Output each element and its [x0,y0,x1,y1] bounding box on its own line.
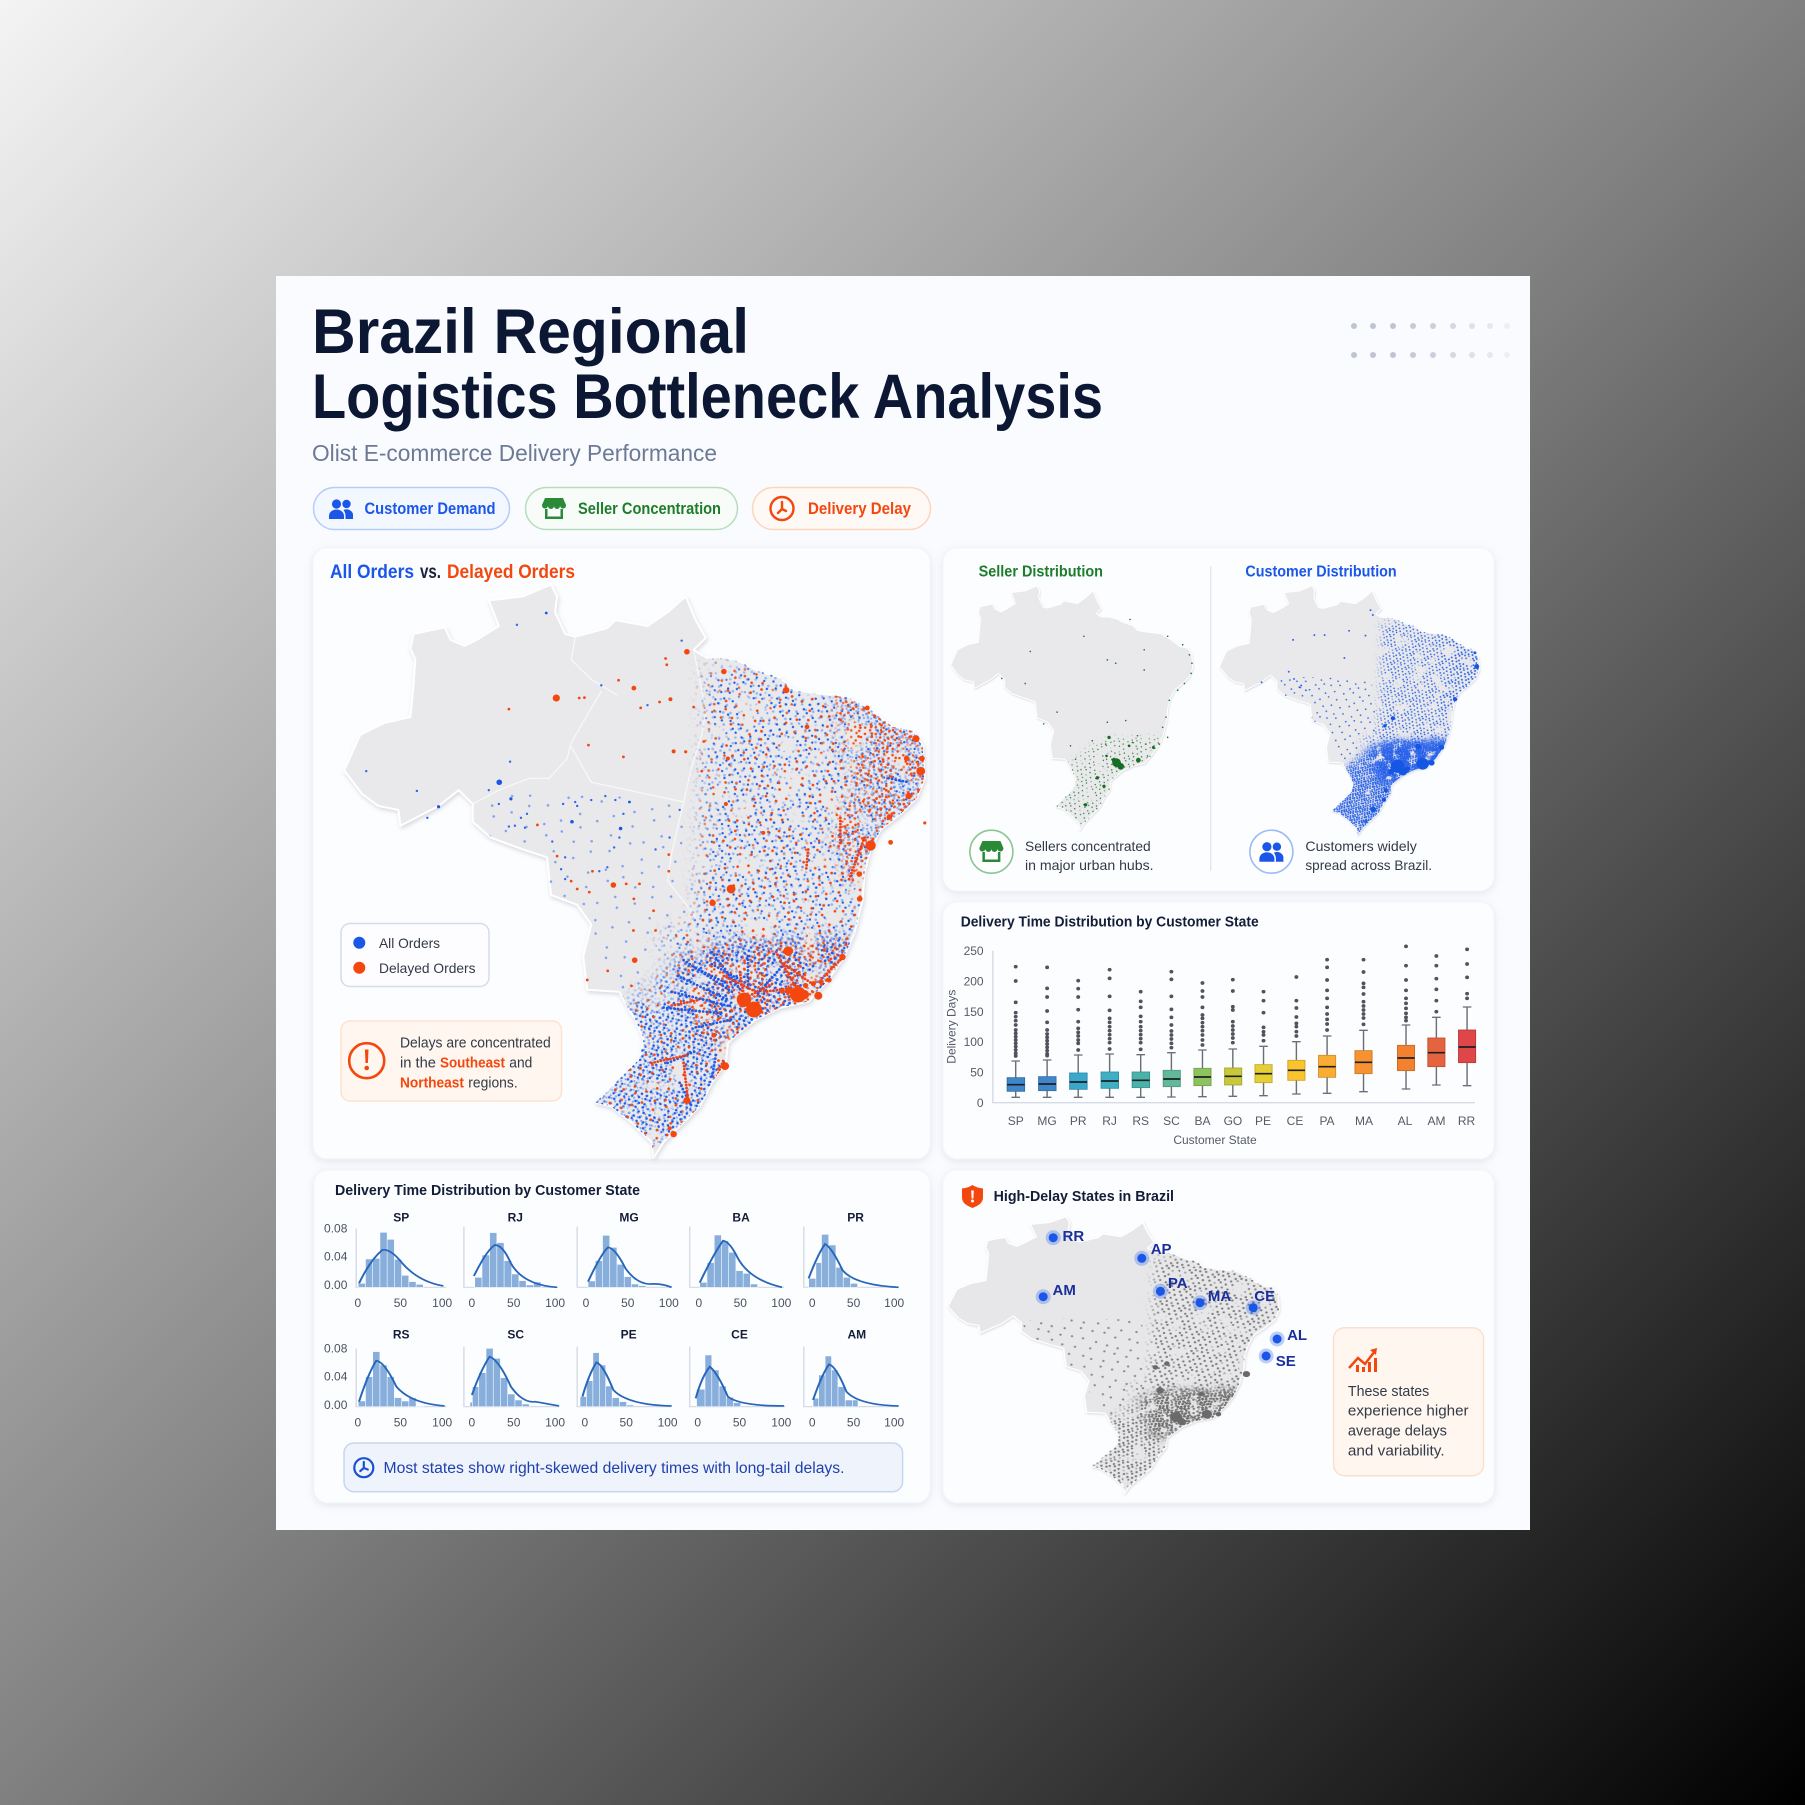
histogram: PR: 50 [847,1296,861,1310]
heading: all orders vs delayed: Delayed Orders [447,562,575,583]
histogram: SP [324,1211,453,1310]
y axis labels: 50 [970,1066,984,1080]
histogram: RJ [464,1211,565,1310]
title: Logistics Bottleneck Analysis [312,362,1103,432]
x axis labels: CE [1287,1114,1303,1128]
histogram: BA: 50 [734,1296,747,1310]
histogram: BA: 0 [696,1296,703,1310]
callout text: regions. [468,1075,518,1091]
heading: seller distribution: Seller Distribution [979,564,1103,581]
histogram: BA: BA [732,1211,750,1225]
pill: delivery delay [752,488,930,530]
histogram: SP: 50 [394,1296,407,1310]
x axis labels: SC [1163,1114,1180,1128]
infographic card [276,276,1530,1530]
title: Brazil Regional [312,297,749,367]
histogram: MG: MG [619,1211,639,1225]
histogram: PR: 0 [809,1296,816,1310]
decorative dot grid [1351,323,1510,358]
histogram: SP: 0.04 [324,1250,348,1264]
histogram: PE: PE [621,1327,637,1341]
state markers [1036,1228,1307,1370]
histogram: SP: 0 [354,1296,361,1310]
x axis labels: BA [1194,1114,1211,1128]
state markers: CE [1254,1288,1275,1305]
histogram: AM: AM [847,1327,866,1341]
callout text: experience higher [1348,1403,1469,1420]
x axis labels: RJ [1102,1114,1117,1128]
histogram: SC [464,1327,565,1430]
state markers: PA [1168,1275,1188,1292]
y axis labels: 100 [964,1035,984,1049]
heading: all orders vs delayed: vs. [420,562,441,583]
panel: all orders vs delayed orders [313,548,930,1159]
histogram: MG: 100 [659,1296,679,1310]
map: high-delay states [948,1217,1279,1493]
histogram: SP: SP [393,1211,409,1225]
histogram: AM: 100 [884,1416,905,1430]
x axis labels: MG [1037,1114,1057,1128]
x axis labels: AM [1428,1114,1446,1128]
x axis labels: PA [1319,1114,1335,1128]
callout text: These states [1348,1383,1429,1400]
customer note: spread across Brazil. [1305,857,1432,873]
histogram: RS: 100 [432,1416,453,1430]
histogram: RS: 0.04 [324,1370,348,1384]
callout text: and [509,1056,532,1072]
histogram: RJ: RJ [508,1211,523,1225]
histogram: PR: 100 [884,1296,905,1310]
state markers: MA [1208,1288,1231,1305]
histogram: BA [690,1211,792,1310]
callout: delay regions [341,1021,562,1101]
legend [341,924,489,986]
state markers: AM [1052,1282,1076,1299]
histogram: SP: 0.00 [324,1278,348,1292]
subtitle: Olist E-commerce Delivery Performance [312,440,717,466]
pill: seller concentration [526,488,738,530]
note: right-skewed delivery times [344,1443,903,1492]
histogram: SC: 0 [469,1416,476,1430]
histogram: PE: 0 [581,1416,588,1430]
icon: clock [770,497,794,520]
heading: high-delay states: High-Delay States in Brazil [994,1188,1174,1205]
panel: histograms [314,1170,930,1503]
histogram: RS: 50 [394,1416,407,1430]
pill: seller concentration: Seller Concentration [578,500,721,518]
map: customer distribution [1219,586,1479,835]
icon: trend chart [1349,1348,1377,1372]
state markers: AL [1287,1327,1307,1344]
icon: clock [354,1458,373,1477]
icon: warning shield [962,1185,983,1208]
histogram: CE: 0 [694,1416,701,1430]
seller note [970,830,1154,873]
histogram: PR [804,1211,905,1310]
y axis labels: 250 [964,944,984,958]
x axis labels: MA [1355,1114,1373,1128]
histogram: RJ: 100 [545,1296,565,1310]
x axis labels: GO [1224,1114,1242,1128]
histogram: SC: 50 [507,1416,521,1430]
histogram: RS: RS [393,1327,410,1341]
heading: all orders vs delayed [330,562,575,583]
histogram: PE [577,1327,678,1430]
callout text: in the [400,1056,436,1072]
heading: histogram small multiples: Delivery Time Distribution by Customer State [335,1183,640,1199]
callout text: Delays are concentrated [400,1036,551,1052]
histogram: CE [690,1327,792,1430]
panel: seller and customer distribution [943,548,1494,891]
x axis labels: PE [1255,1114,1271,1128]
histogram: SP: 100 [432,1296,453,1310]
histogram: RJ: 50 [507,1296,521,1310]
note: right-skewed delivery times: Most states show right-skewed delivery times with long-tail delays. [384,1460,844,1477]
x axis labels: RR [1458,1114,1475,1128]
histogram: RS: 0.08 [324,1341,348,1355]
state markers: SE [1276,1353,1296,1370]
icon: people [329,499,353,519]
map: orders across Brazil [344,585,926,1158]
state markers: AP [1151,1241,1172,1258]
pill: delivery delay: Delivery Delay [808,500,912,518]
title [312,297,1103,432]
histogram: MG: 0 [583,1296,590,1310]
heading: customer distribution: Customer Distribution [1245,564,1397,581]
callout text: average delays [1348,1423,1447,1440]
icon: shop badge [970,830,1013,873]
histogram: SC: SC [507,1327,524,1341]
histogram: CE: 50 [733,1416,746,1430]
legend: Delayed Orders [379,960,476,976]
chart: box plot by state [944,944,1476,1147]
histogram: BA: 100 [771,1296,792,1310]
callout text: and variability. [1348,1443,1445,1460]
y axis labels [964,944,984,1110]
histogram: CE: 100 [771,1416,792,1430]
seller note: in major urban hubs. [1025,857,1154,873]
icon: shop [542,498,566,519]
histogram: CE: CE [731,1327,748,1341]
histogram: MG: 50 [621,1296,635,1310]
x axis title: Customer State [1173,1133,1257,1147]
panel: high-delay states [943,1170,1494,1503]
pill: customer demand [314,488,510,530]
histogram: PR: PR [847,1211,864,1225]
histogram: AM: 50 [847,1416,861,1430]
legend: All Orders [379,935,440,951]
histogram: PE: 100 [658,1416,678,1430]
customer note: Customers widely [1305,838,1417,854]
heading: all orders vs delayed: All Orders [330,562,414,583]
histogram: RJ: 0 [469,1296,476,1310]
map: seller distribution [951,586,1193,830]
histogram: PE: 50 [620,1416,633,1430]
state markers: RR [1062,1228,1084,1245]
histogram: AM: 0 [809,1416,816,1430]
x axis labels [1008,1114,1475,1128]
callout text [1348,1383,1469,1460]
x axis labels: AL [1398,1114,1413,1128]
histogram: MG [577,1211,679,1310]
y axis title: Delivery Days [944,990,958,1064]
x axis labels: PR [1070,1114,1087,1128]
callout: high-delay explanation [1334,1328,1484,1476]
histogram: RS [324,1327,453,1430]
y axis labels: 200 [964,974,984,988]
y axis labels: 0 [977,1096,984,1110]
x axis labels: SP [1008,1114,1024,1128]
seller note: Sellers concentrated [1025,838,1151,854]
histogram: RS: 0.00 [324,1398,348,1412]
customer note [1250,830,1432,873]
histogram: SP: 0.08 [324,1221,348,1235]
heading: delivery time box plot: Delivery Time Distribution by Customer State [961,915,1259,931]
histogram: RS: 0 [354,1416,361,1430]
histogram: SC: 100 [545,1416,565,1430]
callout text [400,1036,551,1091]
pill: customer demand: Customer Demand [364,500,496,518]
icon: warning [349,1043,384,1078]
callout text: Southeast [440,1056,505,1072]
callout text: Northeast [400,1075,464,1091]
icon: people badge [1250,830,1293,873]
panel: box plot [943,902,1494,1159]
histogram: AM [804,1327,905,1430]
y axis labels: 150 [964,1005,984,1019]
x axis labels: RS [1132,1114,1149,1128]
